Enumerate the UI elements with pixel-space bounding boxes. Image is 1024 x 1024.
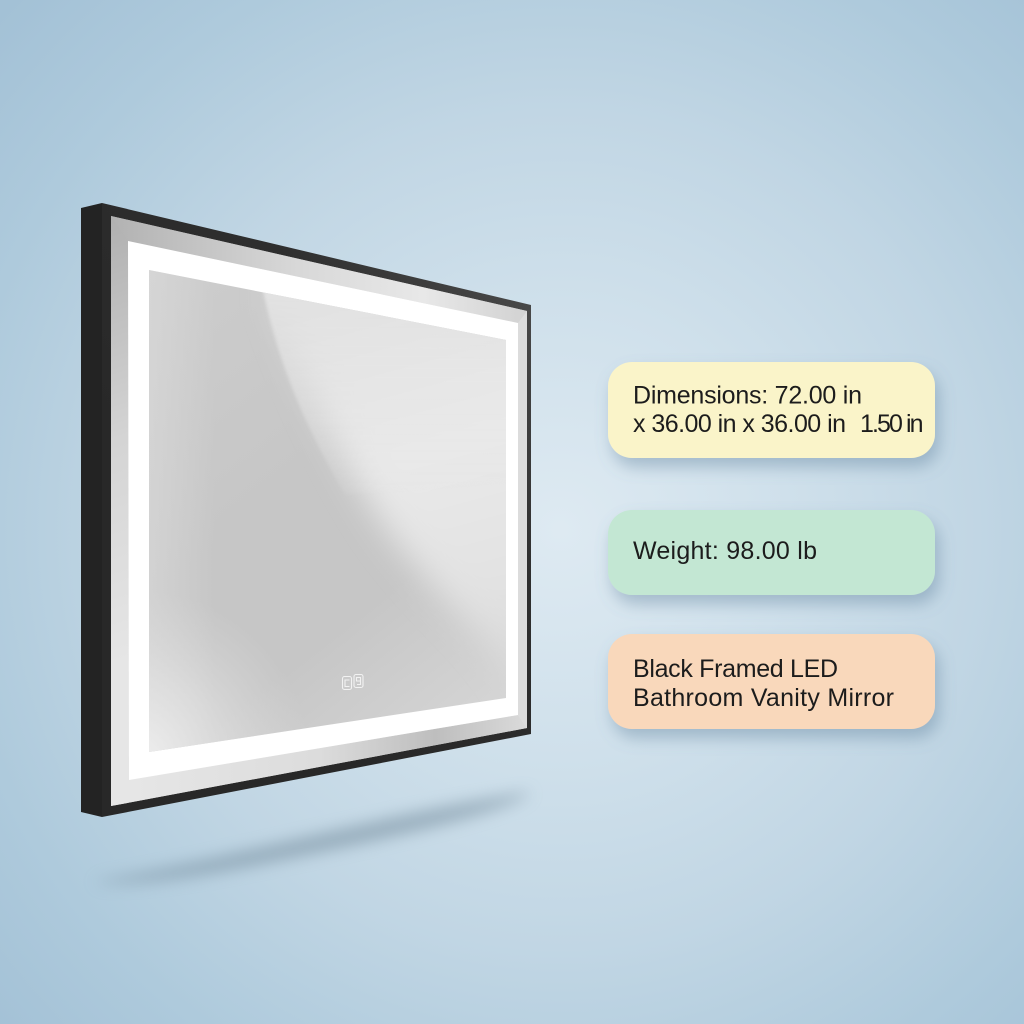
weight text: Weight: 98.00 lb [633,537,817,565]
card: product name [608,634,935,729]
mirror glass [149,270,506,752]
card: weight [608,510,935,595]
dimensions text: Dimensions: 72.00 in [633,382,862,410]
dimensions text: 1.50 in [860,410,924,438]
LED light strip [128,241,518,780]
floor shadow [92,792,532,883]
frame side [81,203,102,817]
touch button left [342,676,352,690]
dimensions text: x 36.00 in x 36.00 in [633,410,846,438]
frame front [102,203,531,817]
touch controls [342,674,363,690]
mirror [81,203,560,817]
touch button right [354,674,363,688]
frosted border [111,216,527,806]
card: dimensions [608,362,935,458]
product name text: Bathroom Vanity Mirror [633,684,894,712]
glass reflection [316,352,506,650]
product name text: Black Framed LED [633,655,838,683]
